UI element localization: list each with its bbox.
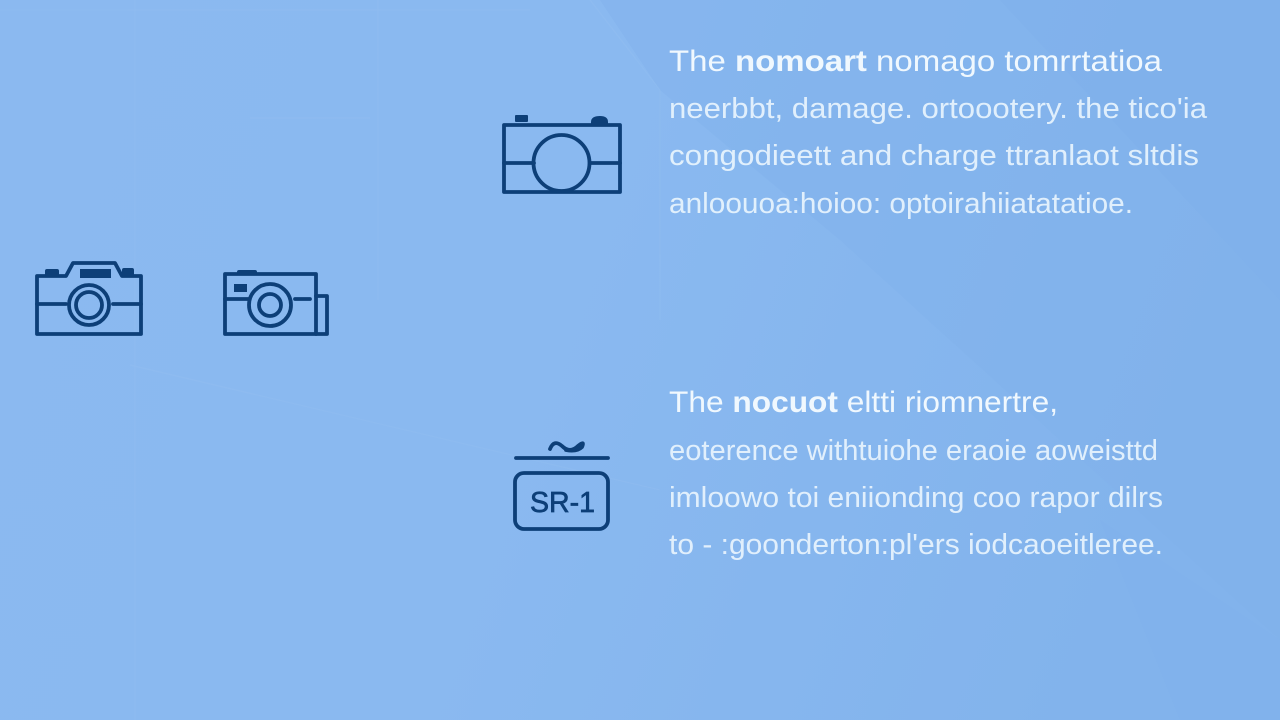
text block: lower paragraph: to - :goonderton:pl'ers iodcaoeitleree. (669, 529, 1163, 561)
text block: upper paragraph: The nomoart nomago tomrrtatioa (669, 45, 1162, 78)
icon: second camera (225, 270, 327, 334)
text block: upper paragraph: anloouoa:hoioo: optoirahiiatatatioe. (669, 188, 1133, 220)
text block: lower paragraph: eoterence withtuiohe eraoie aoweisttd (669, 435, 1158, 467)
text block: upper paragraph (669, 45, 1208, 220)
icon: left camera (37, 263, 141, 334)
text block: lower paragraph: imloowo toi eniionding coo rapor dilrs (669, 482, 1163, 514)
label: SR-1: SR-1 (530, 487, 595, 519)
text block: upper paragraph: congodieett and charge ttranlaot sltdis (669, 140, 1199, 172)
icon: upper right camera (504, 115, 620, 192)
text block: lower paragraph: The nocuot eltti riomnertre, (669, 386, 1058, 419)
text block: upper paragraph: neerbbt, damage. ortoootery. the tico'ia (669, 93, 1208, 125)
text block: lower paragraph (669, 386, 1163, 561)
icon: SR-1 badge (515, 443, 608, 529)
